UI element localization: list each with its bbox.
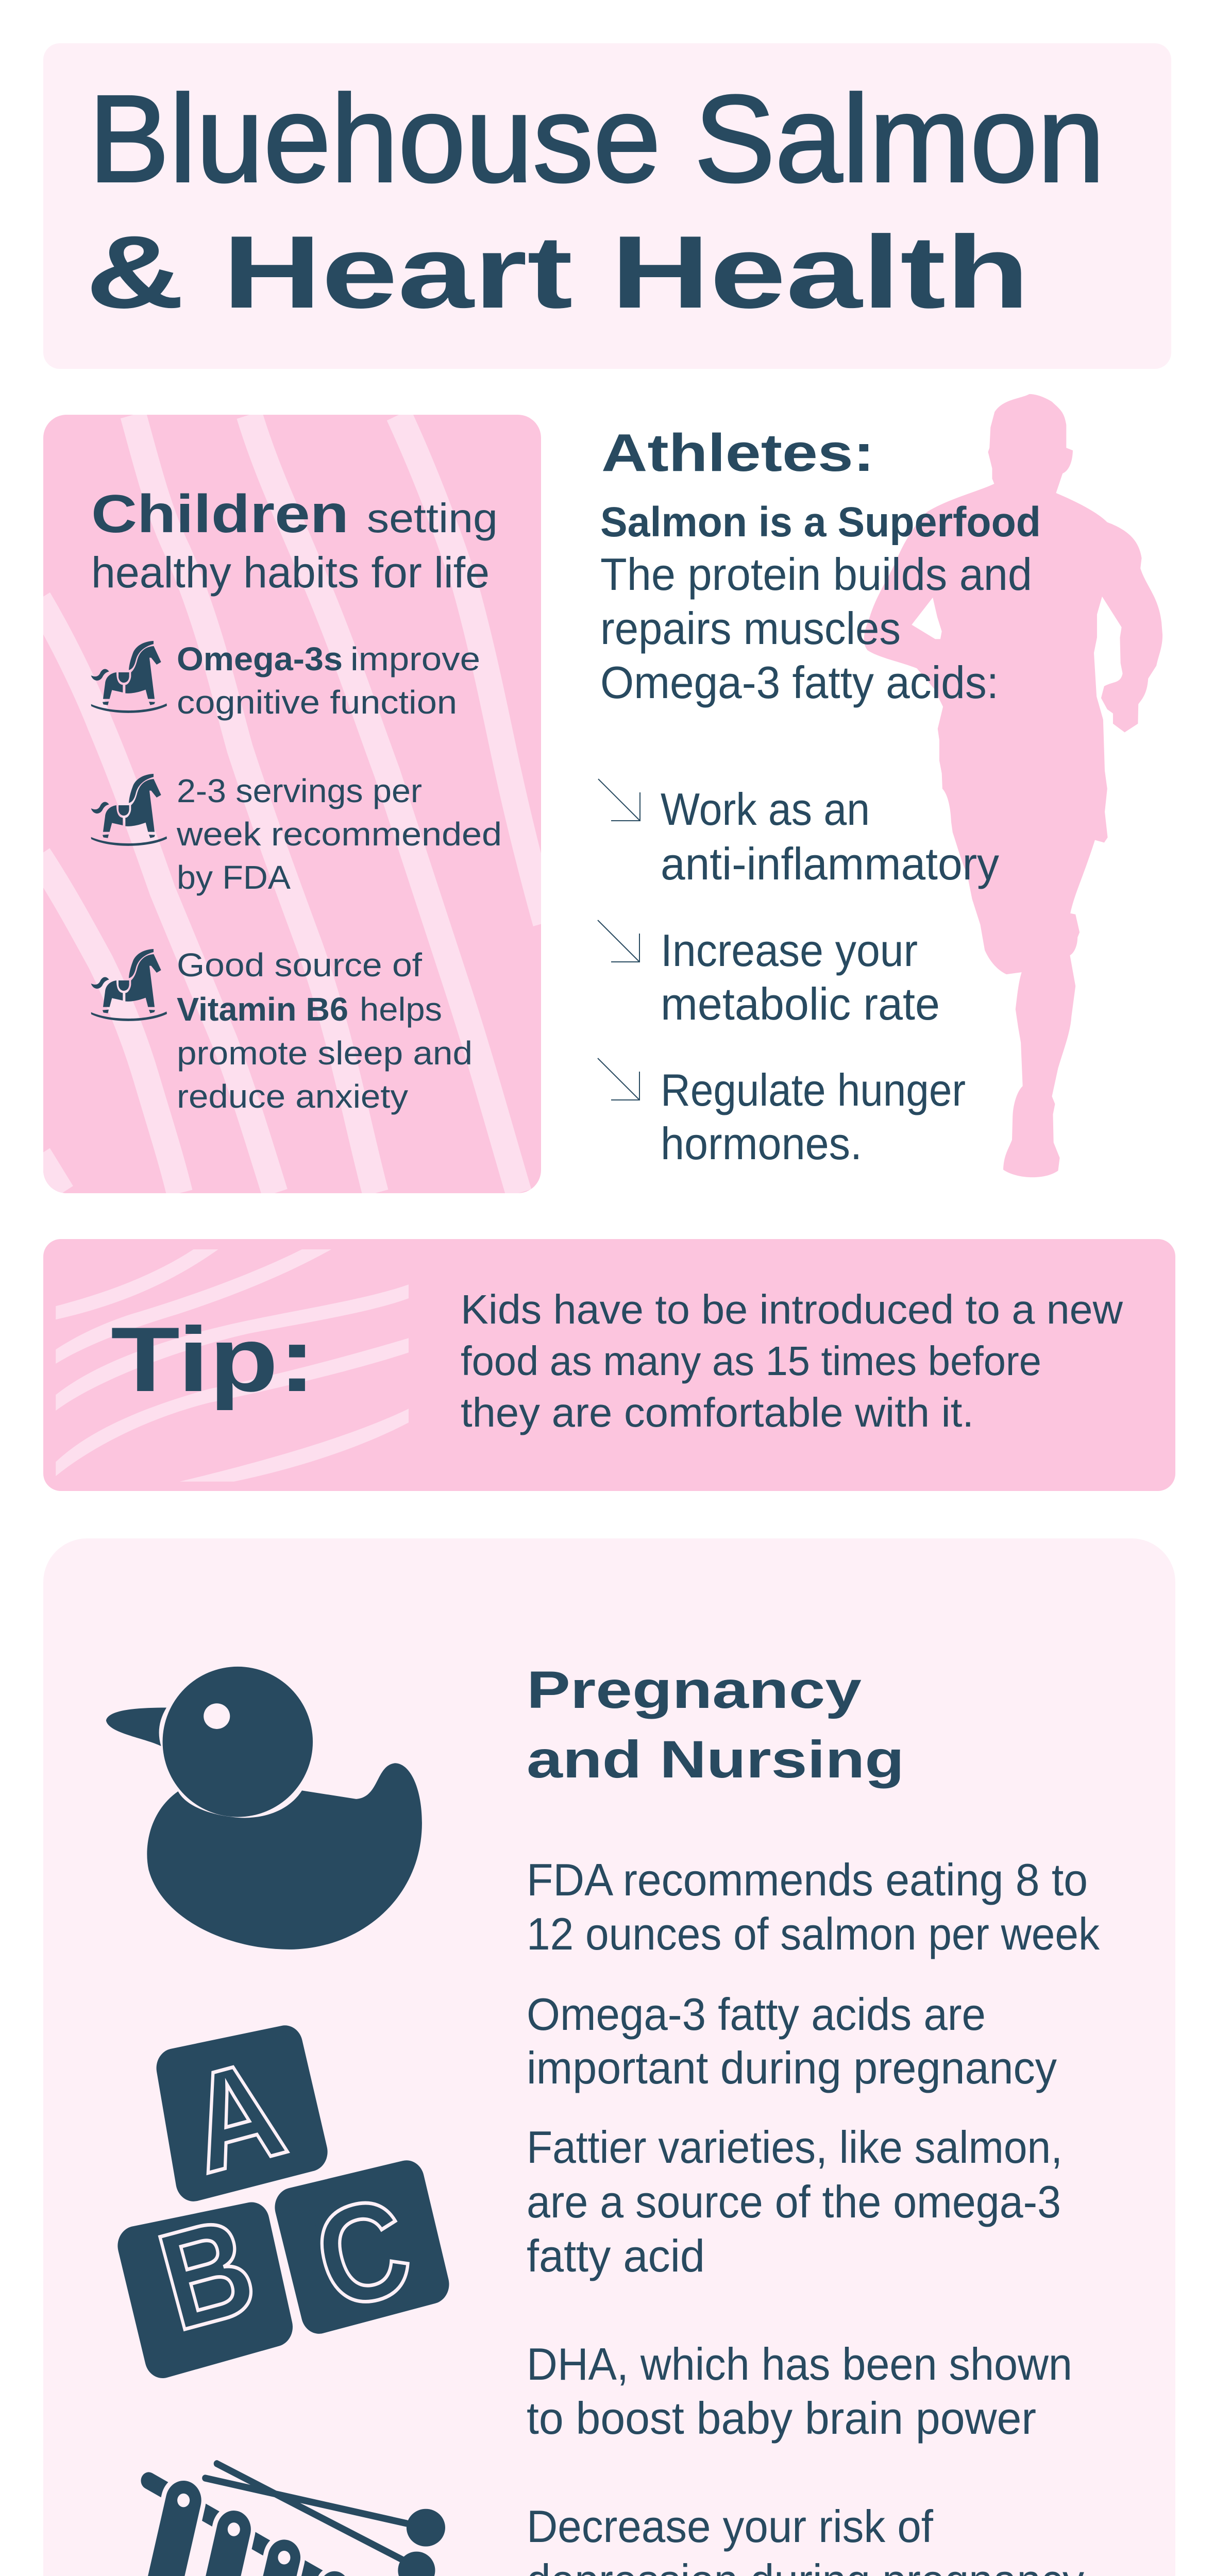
text: servings: week recommended bbox=[176, 816, 502, 853]
pregnancy heading: Pregnancy bbox=[527, 1660, 862, 1719]
runner silhouette bbox=[864, 394, 1162, 1177]
athletes intro: The protein builds and bbox=[600, 549, 1032, 600]
text: vitamin b6: Good source of bbox=[177, 946, 422, 984]
benefit: anti-inflammatory bbox=[661, 784, 999, 889]
athletes intro bbox=[600, 549, 1032, 708]
text: omega-3 bbox=[527, 1989, 1057, 2093]
icon: alphabet blocks: B bbox=[144, 2187, 270, 2360]
icon: arrow bbox=[598, 920, 639, 962]
benefit: metabolic rate: Increase your bbox=[661, 925, 918, 976]
text: fattier varieties: are a source of the omega-3 bbox=[527, 2176, 1061, 2227]
benefit: hunger hormones: hormones. bbox=[661, 1118, 862, 1169]
text: servings: 2-3 servings per bbox=[177, 772, 422, 809]
pregnancy heading bbox=[527, 1660, 904, 1789]
tip body: Kids have to be introduced to a new bbox=[461, 1286, 1123, 1332]
benefit: hunger hormones: Regulate hunger bbox=[661, 1064, 966, 1115]
text: vitamin b6: Vitamin B6 bbox=[177, 991, 348, 1028]
panel: kids tip bbox=[43, 1239, 1175, 1491]
icon: rocking horse bbox=[91, 641, 167, 713]
panel: pregnancy and nursing bbox=[43, 1538, 1175, 2576]
text: fattier varieties: Fattier varieties, like salmon, bbox=[527, 2122, 1063, 2173]
tip label: Tip: bbox=[111, 1308, 316, 1411]
tip body: they are comfortable with it. bbox=[461, 1389, 974, 1435]
children heading: Children bbox=[91, 484, 349, 544]
tip body: food as many as 15 times before bbox=[461, 1338, 1041, 1384]
athletes intro: repairs muscles bbox=[600, 603, 901, 654]
benefit: metabolic rate bbox=[661, 925, 940, 1029]
children heading: setting bbox=[367, 495, 498, 541]
text: servings bbox=[176, 772, 502, 896]
text: fda recommendation: FDA recommends eating 8 to bbox=[527, 1854, 1088, 1905]
text: vitamin b6 bbox=[177, 946, 473, 1115]
text: depression: Decrease your risk of bbox=[527, 2501, 934, 2552]
pregnancy heading: and Nursing bbox=[527, 1730, 904, 1789]
background stripes: children bbox=[39, 415, 546, 1193]
text: dha: DHA, which has been shown bbox=[527, 2338, 1072, 2389]
athletes heading: Athletes: bbox=[601, 423, 874, 482]
text: depression bbox=[527, 2501, 1084, 2576]
athletes subheading: Salmon is a Superfood bbox=[600, 499, 1041, 546]
title line one: Bluehouse Salmon bbox=[89, 70, 1105, 208]
title panel bbox=[43, 43, 1171, 369]
benefit: anti-inflammatory: anti-inflammatory bbox=[661, 838, 999, 889]
icon: alphabet blocks bbox=[136, 2029, 431, 2360]
text: servings: by FDA bbox=[177, 859, 291, 896]
children heading: healthy habits for life bbox=[91, 548, 490, 597]
athletes intro: Omega-3 fatty acids: bbox=[600, 657, 999, 708]
icon: alphabet blocks: A bbox=[173, 2029, 298, 2202]
text: omega-3: Omega-3 fatty acids are bbox=[527, 1989, 986, 2040]
icon: arrow bbox=[598, 779, 640, 821]
text: fda recommendation bbox=[527, 1854, 1100, 1959]
text: fattier varieties bbox=[527, 2122, 1063, 2281]
benefit: hunger hormones bbox=[661, 1064, 966, 1169]
icon: arrow bbox=[598, 1058, 639, 1100]
text: vitamin b6: reduce anxiety bbox=[177, 1078, 408, 1115]
icon: rubber duck bbox=[106, 1667, 422, 1950]
tip body bbox=[461, 1286, 1123, 1435]
icon: xylophone bbox=[99, 2464, 445, 2576]
title line two: & Heart Health bbox=[86, 215, 1030, 330]
text: omega-3s: improve bbox=[350, 640, 480, 677]
text: omega-3s bbox=[177, 640, 480, 721]
text: omega-3s: Omega-3s bbox=[177, 640, 343, 677]
background stripes: kids tip bbox=[56, 1249, 409, 1482]
text: omega-3: important during pregnancy bbox=[527, 2042, 1057, 2093]
text: fda recommendation: 12 ounces of salmon per week bbox=[527, 1908, 1100, 1959]
icon: rocking horse bbox=[91, 949, 167, 1021]
text: dha: to boost baby brain power bbox=[527, 2393, 1036, 2444]
benefit: metabolic rate: metabolic rate bbox=[661, 978, 940, 1029]
athletes text bbox=[598, 423, 1041, 1169]
children heading bbox=[91, 484, 498, 597]
text: dha bbox=[527, 2338, 1072, 2444]
text: fattier varieties: fatty acid bbox=[527, 2230, 705, 2281]
panel: children bbox=[39, 415, 546, 1193]
benefit: anti-inflammatory: Work as an bbox=[661, 784, 870, 835]
icon: alphabet blocks: C bbox=[300, 2166, 426, 2340]
text: vitamin b6: helps bbox=[360, 991, 442, 1028]
text: omega-3s: cognitive function bbox=[177, 684, 457, 721]
text: vitamin b6: promote sleep and bbox=[177, 1035, 473, 1072]
icon: rocking horse bbox=[91, 774, 167, 846]
